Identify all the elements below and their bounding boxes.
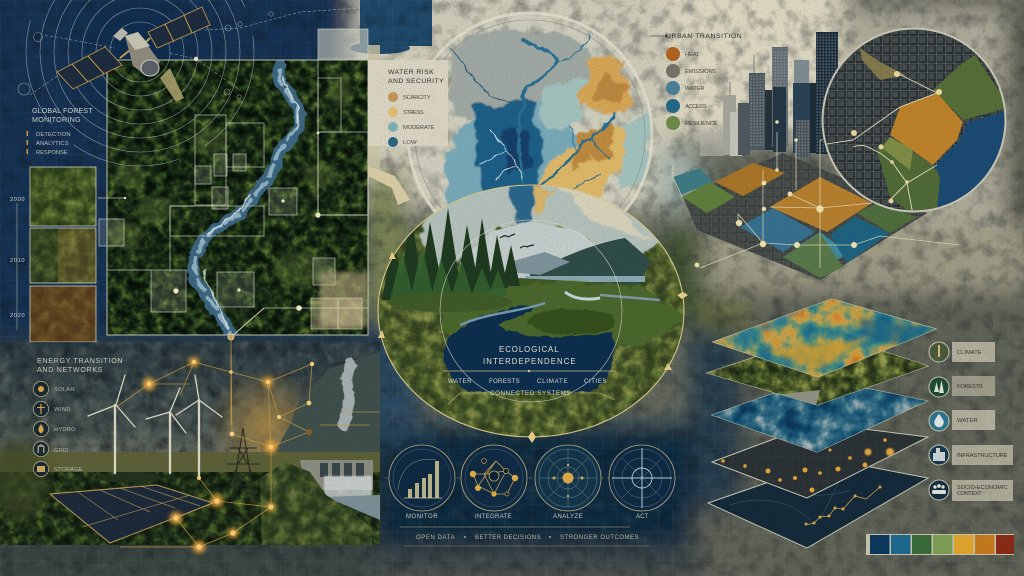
- forest canopy texture: [107, 60, 368, 335]
- text: outcomes strip: STRONGER OUTCOMES: [560, 535, 639, 541]
- river: [193, 66, 300, 336]
- mountains: [274, 352, 380, 452]
- river and dark water: [443, 304, 615, 392]
- text: water risk heading: WATER RISK: [388, 69, 434, 76]
- thumbnail 2000: [30, 167, 96, 226]
- text: connected themes: [448, 378, 607, 385]
- layer labels: [929, 342, 1013, 501]
- legend: urban indicators: EMISSIONS: [685, 69, 717, 75]
- text: step labels: ANALYZE: [553, 514, 583, 520]
- text: global forest monitoring heading: MONITORING: [32, 115, 81, 124]
- legend: water risk levels: [388, 92, 435, 147]
- watershed zones: [443, 28, 650, 206]
- timeline: forest change thumbnails: 2010: [10, 258, 25, 264]
- label: water: [929, 410, 995, 431]
- text: step labels: ACT: [636, 514, 649, 520]
- list: energy sources: HYDRO: [54, 427, 76, 433]
- conifer forest: [382, 208, 520, 300]
- list: energy sources: GRID: [54, 448, 69, 454]
- text: step labels: INTEGRATE: [475, 514, 512, 520]
- label: climate: [929, 342, 995, 362]
- meadow: [440, 278, 690, 350]
- layer: socio-economic: [708, 460, 928, 548]
- icon: analyze: [535, 445, 601, 511]
- layer: climate: [712, 298, 938, 378]
- layer: water: [710, 388, 928, 452]
- list: energy sources: [33, 381, 83, 477]
- legend: water risk levels: LOW: [403, 140, 417, 146]
- text: outcomes strip: OPEN DATA: [416, 535, 455, 541]
- text: urban heading: URBAN TRANSITION: [666, 33, 742, 40]
- satellite scan rings: [18, 0, 360, 166]
- text: step labels: [406, 514, 649, 520]
- panel: water risk and security legend: [368, 60, 448, 205]
- timeline: forest change thumbnails: 2020: [10, 313, 25, 319]
- valley sky: [460, 221, 594, 278]
- text: outcomes strip: BETTER DECISIONS: [475, 535, 541, 541]
- label: infrastructure: INFRASTRUCTURE: [957, 453, 1008, 459]
- timeline: forest change thumbnails: 2000: [10, 197, 25, 203]
- map inset: city districts: [820, 25, 1010, 220]
- dam: [300, 460, 380, 520]
- layer: forests: [706, 351, 930, 406]
- icon: satellite: [57, 7, 210, 102]
- energy network: [115, 337, 380, 553]
- list: energy sources: SOLAR: [54, 387, 75, 393]
- legend: urban indicators: ACCESS: [685, 104, 707, 110]
- list: energy sources: STORAGE: [54, 467, 83, 473]
- city skyline: [700, 32, 838, 158]
- thumbnail 2020: [30, 286, 96, 342]
- rivers: [449, 34, 616, 190]
- text: ecological interdependence title: [483, 345, 576, 366]
- text: energy heading: ENERGY TRANSITION: [37, 356, 123, 365]
- list: monitoring functions: DETECTION: [36, 132, 71, 138]
- label: water: WATER: [957, 418, 978, 424]
- text: water risk heading: AND SECURITY: [388, 78, 444, 85]
- legend: colour palette: [866, 534, 1014, 555]
- solar array: [50, 485, 213, 543]
- panel: energy transition and networks: [0, 337, 380, 553]
- panel: process steps: [385, 445, 680, 546]
- list: monitoring functions: RESPONSE: [36, 150, 68, 156]
- list: energy sources: WIND: [54, 407, 71, 413]
- label: socio-economic context: SOCIO-ECONOMIC: [957, 485, 1008, 491]
- text: water risk heading: [388, 69, 444, 85]
- legend: urban indicators: WATER: [685, 86, 705, 92]
- legend: urban indicators: [666, 47, 718, 130]
- label: climate: CLIMATE: [957, 350, 982, 356]
- text: ecological interdependence title: INTERDEPENDENCE: [483, 357, 576, 366]
- icon: monitor: [389, 445, 455, 511]
- label: forests: [929, 376, 995, 397]
- text: outcomes strip: [416, 535, 639, 541]
- text: step labels: MONITOR: [406, 514, 438, 520]
- text: connected systems: CONNECTED SYSTEMS: [490, 390, 571, 397]
- legend: water risk levels: MODERATE: [403, 125, 435, 131]
- cycle arrows: [378, 252, 688, 443]
- timeline: forest change thumbnails: [10, 167, 96, 342]
- text: connected systems: [448, 390, 615, 404]
- layer: infrastructure: [710, 429, 930, 498]
- label: socio-economic context: CONTEXT: [957, 491, 982, 497]
- meadow and trees: [0, 452, 380, 472]
- panel: water risk map: [407, 12, 654, 213]
- wooded hill: [258, 460, 374, 546]
- text: connected themes: CLIMATE: [537, 378, 568, 385]
- mountains: [530, 238, 650, 285]
- text: connected themes: WATER: [448, 378, 472, 385]
- birds: [500, 234, 534, 248]
- text: global forest monitoring heading: GLOBAL FOREST: [32, 106, 93, 115]
- isometric district map: [673, 120, 960, 280]
- list: monitoring functions: [26, 131, 71, 156]
- label: forests: FORESTS: [957, 384, 983, 390]
- text: connected themes: CITIES: [584, 378, 607, 385]
- text: ecological interdependence title: ECOLOGICAL: [499, 345, 559, 354]
- icon: act: [609, 445, 675, 511]
- monitoring grid tiles: [99, 29, 368, 312]
- legend: water risk levels: STRESS: [403, 110, 424, 116]
- list: monitoring functions: ANALYTICS: [36, 141, 69, 147]
- legend: urban indicators: HEAT: [685, 52, 700, 58]
- panel: ecological interdependence landscape: [375, 175, 690, 443]
- icon: integrate: [461, 445, 527, 511]
- text: global forest monitoring heading: [32, 106, 93, 124]
- stormy sky: [0, 342, 380, 452]
- panel: stacked data layers: [700, 295, 1014, 555]
- panel: global forest monitoring map: [98, 29, 380, 340]
- upper map ring: [418, 186, 660, 270]
- lake: [525, 276, 645, 282]
- label: infrastructure: [929, 445, 1013, 465]
- text: energy heading: AND NETWORKS: [37, 365, 103, 374]
- label: socio-economic context: [929, 480, 1013, 501]
- wind turbines: [88, 375, 222, 476]
- pylon: [226, 428, 260, 505]
- text: energy heading: [37, 356, 123, 374]
- thumbnail 2010: [30, 228, 96, 283]
- panel: urban transition isometric map: [650, 25, 1010, 280]
- text: connected themes: FORESTS: [489, 378, 520, 385]
- legend: urban indicators: RESILIENCE: [685, 121, 718, 127]
- legend: water risk levels: SCARCITY: [403, 95, 431, 101]
